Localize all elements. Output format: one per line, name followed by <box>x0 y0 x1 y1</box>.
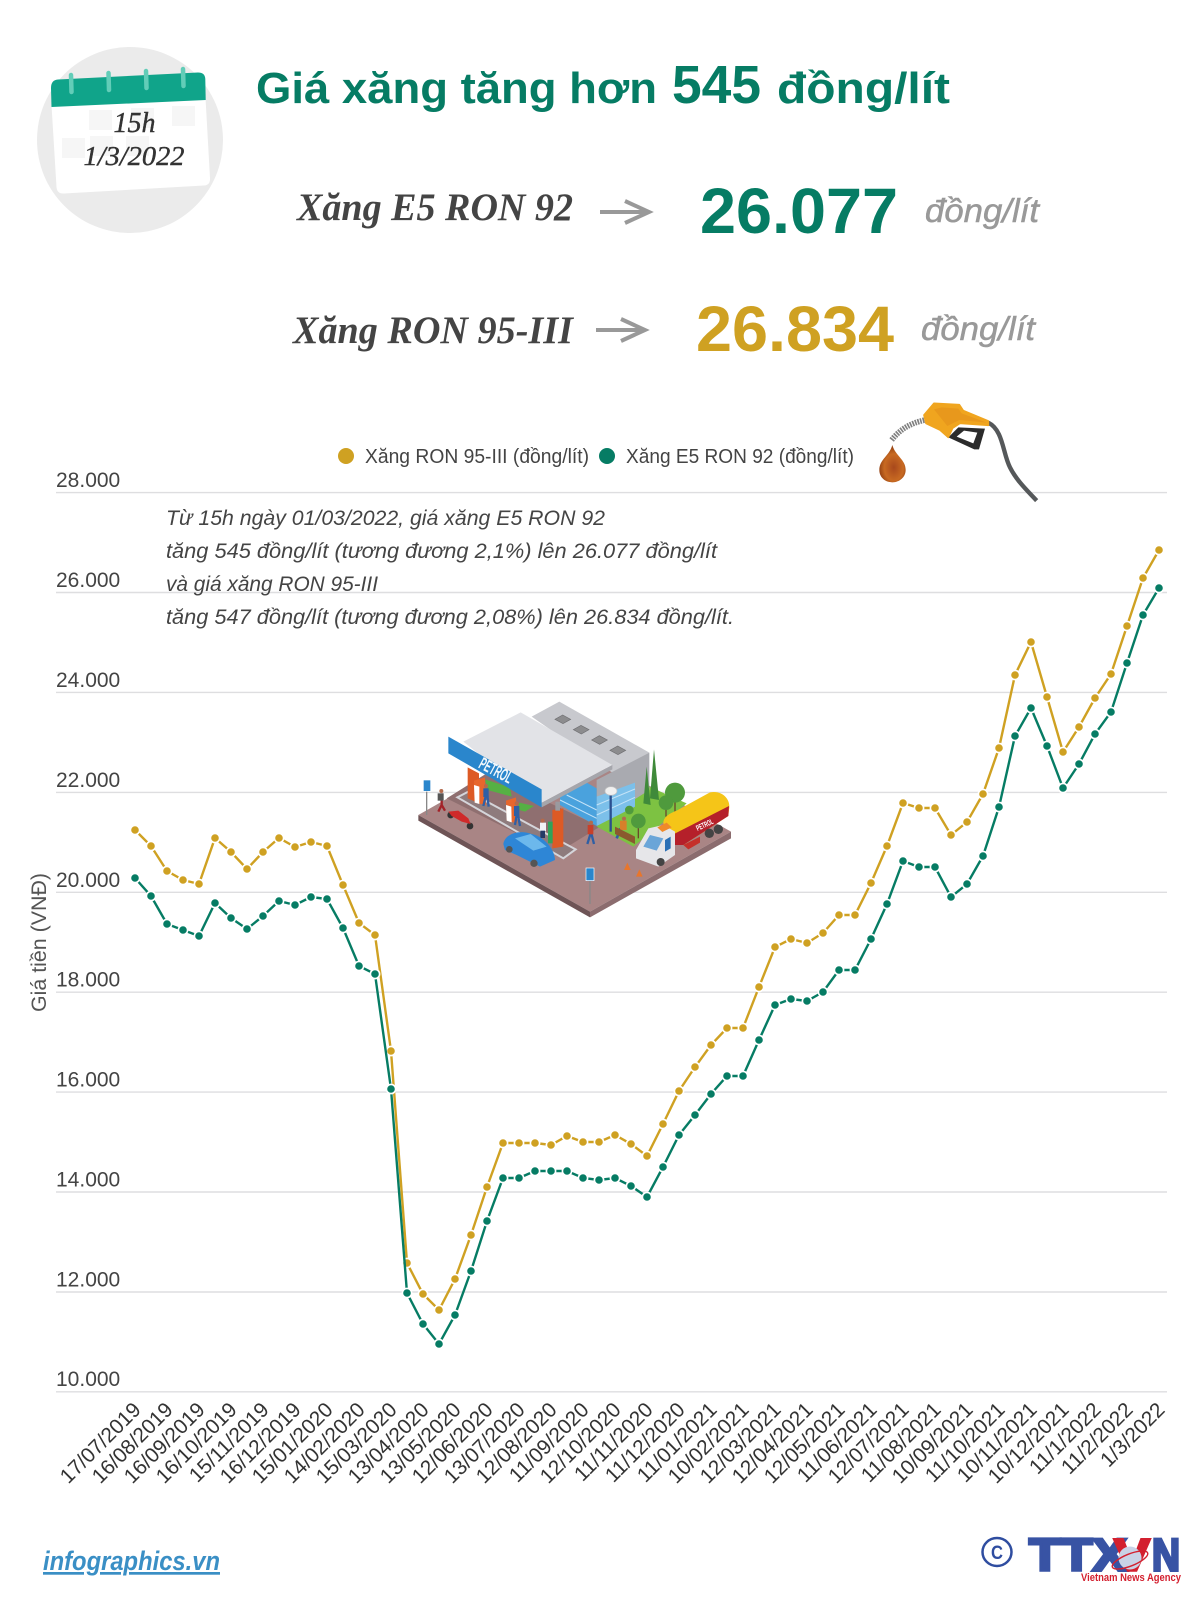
series: E5 RON 92 <box>135 588 1159 1344</box>
legend: Xăng E5 RON 92 (đồng/lít) <box>626 446 854 468</box>
copyright mark: C <box>991 1543 1003 1564</box>
canopy pillars <box>468 767 479 803</box>
y axis labels: 16.000 <box>56 1068 120 1092</box>
x axis date labels: 12/06/2020 <box>408 1398 498 1488</box>
annotation text block: tăng 547 đồng/lít (tương đương 2,08%) lên 26.834 đồng/lít. <box>166 606 734 629</box>
x axis date labels: 16/08/2019 <box>88 1398 178 1488</box>
trees <box>625 749 685 838</box>
y axis labels: 10.000 <box>56 1368 120 1391</box>
x axis date labels: 11/11/2020 <box>570 1398 658 1486</box>
calendar background circle <box>37 47 223 233</box>
x axis date labels: 11/06/2021 <box>793 1398 882 1487</box>
price E5: 26.077 <box>700 175 898 247</box>
label E5 RON 92: Xăng E5 RON 92 <box>296 186 573 229</box>
x axis date labels: 17/07/2019 <box>56 1398 146 1488</box>
x axis date labels: 11/12/2020 <box>601 1398 690 1487</box>
calendar faint cells <box>62 106 195 158</box>
x axis date labels: 10/09/2021 <box>888 1398 978 1488</box>
arrow <box>600 201 649 223</box>
calendar icon with date <box>37 47 223 233</box>
price row: RON 95-III <box>292 293 1037 365</box>
calendar rings <box>71 69 184 92</box>
forecourt island <box>457 792 576 858</box>
x axis date labels: 13/04/2020 <box>344 1398 434 1488</box>
title <box>256 55 950 115</box>
bench <box>615 827 635 844</box>
x axis date labels: 13/07/2020 <box>440 1398 530 1488</box>
annotation text block: và giá xăng RON 95-III <box>166 573 378 596</box>
price row: E5 RON 92 <box>296 175 1041 247</box>
nozzle highlight <box>934 407 987 426</box>
oil drop <box>879 445 906 482</box>
x axis date labels: 16/09/2019 <box>120 1398 210 1488</box>
V letter: V <box>1114 1530 1150 1580</box>
people <box>438 784 627 844</box>
x axis date labels: 10/11/2021 <box>953 1398 1042 1487</box>
trigger guard <box>948 427 985 449</box>
x axis date labels: 12/07/2021 <box>824 1398 914 1488</box>
copyright mark <box>982 1538 1012 1566</box>
x axis date labels: 11/09/2020 <box>505 1398 594 1487</box>
illustration: petrol station <box>418 702 731 917</box>
canopy <box>463 712 612 803</box>
unit: đồng/lít <box>921 310 1037 347</box>
green car behind pumps <box>485 779 534 812</box>
blue car <box>503 832 555 867</box>
arrow <box>596 319 645 341</box>
x axis date labels: 12/10/2020 <box>536 1398 626 1488</box>
street lamp <box>605 787 617 832</box>
spout <box>892 420 925 440</box>
y axis labels: 20.000 <box>56 869 120 892</box>
legend <box>338 446 854 468</box>
tanker truck <box>636 792 729 867</box>
y axis labels: 22.000 <box>56 769 120 792</box>
y axis title: Giá tiền (VNĐ) <box>28 873 51 1012</box>
TTXVN logo <box>982 1530 1182 1584</box>
N letter: N <box>1152 1530 1180 1580</box>
forecourt shadow <box>447 773 600 853</box>
building <box>532 702 649 773</box>
hose <box>988 423 1037 501</box>
icon: fuel nozzle with oil drop <box>879 403 1037 501</box>
x axis date labels: 13/05/2020 <box>376 1398 466 1488</box>
title: đồng/lít <box>777 64 950 113</box>
title: Giá xăng tăng hơn <box>256 64 657 113</box>
PETROL sign: PETROL <box>476 753 517 788</box>
annotation text block: Từ 15h ngày 01/03/2022, giá xăng E5 RON 92 <box>166 507 605 530</box>
y axis labels: 18.000 <box>56 968 120 992</box>
calendar header band <box>51 72 206 107</box>
series: RON 95-III <box>135 550 1159 1310</box>
x axis date labels: 15/01/2020 <box>248 1398 338 1488</box>
x axis date labels: 12/08/2020 <box>472 1398 562 1488</box>
platform <box>418 735 731 912</box>
legend: Xăng RON 95-III (đồng/lít) <box>365 446 589 468</box>
x axis date labels: 14/02/2020 <box>280 1398 370 1488</box>
globe <box>1110 1546 1150 1573</box>
y axis labels: 14.000 <box>56 1168 120 1192</box>
y axis labels <box>56 469 120 1391</box>
x axis date labels: 11/08/2021 <box>857 1398 946 1487</box>
source link: infographics.vn <box>43 1546 220 1576</box>
x axis date labels: 15/03/2020 <box>312 1398 402 1488</box>
agency name: Vietnam News Agency <box>1081 1572 1182 1584</box>
roof vents <box>555 715 626 755</box>
x axis date labels: 15/11/2019 <box>185 1398 274 1487</box>
x axis date labels: 11/10/2021 <box>921 1398 1010 1487</box>
fuel pumps <box>474 777 486 805</box>
calendar time: 15h <box>114 108 156 139</box>
x axis date labels: 12/03/2021 <box>696 1398 786 1488</box>
x axis date labels: 1/3/2022 <box>1096 1398 1170 1472</box>
canopy fascia <box>448 737 542 807</box>
line chart <box>28 446 1170 1488</box>
unit: đồng/lít <box>925 192 1041 229</box>
y axis labels: 26.000 <box>56 569 120 592</box>
parking signs <box>423 780 594 904</box>
x axis date labels: 16/10/2019 <box>152 1398 242 1488</box>
lawn <box>597 787 687 847</box>
x axis date labels <box>56 1398 1170 1488</box>
x axis date labels: 12/05/2021 <box>760 1398 850 1488</box>
price RON 95: 26.834 <box>696 293 894 365</box>
x axis date labels: 12/04/2021 <box>728 1398 818 1488</box>
y axis labels: 28.000 <box>56 469 120 492</box>
calendar date: 1/3/2022 <box>84 141 184 171</box>
y axis labels: 24.000 <box>56 669 120 692</box>
motorcycle <box>447 811 473 829</box>
traffic cones <box>624 863 643 877</box>
x axis date labels: 16/12/2019 <box>216 1398 306 1488</box>
x axis date labels: 10/12/2021 <box>984 1398 1074 1488</box>
x axis date labels: 11/1/2022 <box>1025 1398 1106 1479</box>
annotation text block <box>166 507 734 629</box>
TTX letters: TTX <box>1029 1530 1127 1580</box>
nozzle body <box>924 403 988 437</box>
tanker truck: PETROL <box>695 817 715 833</box>
x axis date labels: 10/02/2021 <box>664 1398 754 1488</box>
calendar sheet <box>52 98 210 194</box>
annotation text block: tăng 545 đồng/lít (tương đương 2,1%) lên 26.077 đồng/lít <box>166 540 718 563</box>
title: 545 <box>672 55 761 115</box>
x axis date labels: 11/2/2022 <box>1057 1398 1138 1479</box>
y axis labels: 12.000 <box>56 1268 120 1292</box>
label RON 95-III: Xăng RON 95-III <box>292 309 575 352</box>
x axis date labels: 11/01/2021 <box>633 1398 722 1487</box>
